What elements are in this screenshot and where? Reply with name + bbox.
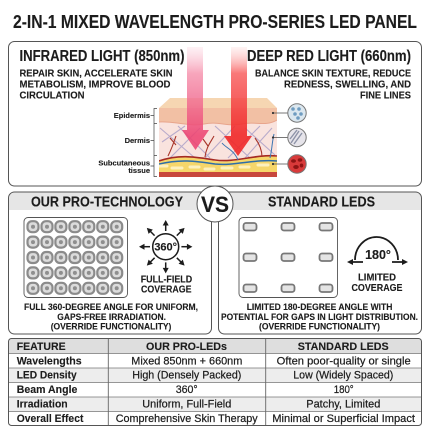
label: full-field coverage xyxy=(141,274,192,296)
text: infrared benefits: CIRCULATION xyxy=(20,89,84,101)
label: limited coverage: COVERAGE xyxy=(352,283,403,294)
LED grid: widely spaced xyxy=(239,218,338,298)
table row: wavelengths xyxy=(17,355,411,367)
table row: overall effect: Overall Effect xyxy=(17,413,84,425)
text: deep red benefits: REDNESS, SWELLING, AND xyxy=(284,78,411,90)
text: infrared benefits: METABOLISM, IMPROVE BLOOD xyxy=(20,78,171,90)
VS badge: VS xyxy=(201,192,229,217)
text: deep red benefits xyxy=(255,68,411,101)
text: standard LEDs description: LIMITED 180-DEGREE ANGLE WITH xyxy=(247,302,392,312)
table row: beam angle xyxy=(17,384,354,396)
heading: standard LEDs: STANDARD LEDS xyxy=(268,194,375,210)
label: limited coverage: LIMITED xyxy=(358,273,396,284)
table row: beam angle: 360° xyxy=(176,384,198,396)
text: standard LEDs description: POTENTIAL FOR GAPS IN LIGHT DISTRIBUTION. xyxy=(221,312,418,322)
table row: wavelengths: Often poor-quality or single xyxy=(277,355,411,367)
icon: collagen fibers xyxy=(272,128,306,147)
text: pro-technology description xyxy=(24,302,198,332)
heading: infrared light: INFRARED LIGHT (850nm) xyxy=(20,48,184,65)
skin cross-section diagram xyxy=(159,98,277,177)
table row: wavelengths: Mixed 850nm + 660nm xyxy=(131,355,242,367)
skin layer labels: Epidermis xyxy=(114,111,150,120)
table row: wavelengths: Wavelengths xyxy=(17,355,82,367)
icon: skin cells xyxy=(272,104,306,122)
table header xyxy=(17,341,389,353)
label: full-field coverage: COVERAGE xyxy=(141,285,192,296)
text: pro-technology description: FULL 360-DEGREE ANGLE FOR UNIFORM, xyxy=(24,302,198,312)
icon: 360 degree beam xyxy=(139,220,192,273)
table header: FEATURE xyxy=(17,341,66,353)
table row: overall effect xyxy=(17,413,415,425)
text: pro-technology description: (OVERRIDE FUNCTIONALITY) xyxy=(51,322,171,332)
table row: irradiation: Uniform, Full-Field xyxy=(142,399,231,411)
heading: our pro-technology: OUR PRO-TECHNOLOGY xyxy=(31,194,183,210)
panel: light wavelengths xyxy=(8,42,422,186)
VS badge xyxy=(197,186,233,222)
arrow: deep red beam xyxy=(224,47,252,156)
label: full-field coverage: FULL-FIELD xyxy=(141,274,192,285)
comparison table xyxy=(8,338,422,426)
table row: overall effect: Minimal or Superficial Impact xyxy=(272,413,415,425)
table row: beam angle: 180° xyxy=(334,384,354,396)
arrow: infrared beam xyxy=(182,47,209,150)
text: pro-technology description: GAPS-FREE IRRADIATION. xyxy=(57,312,166,322)
table row: LED density: Low (Widely Spaced) xyxy=(293,370,393,382)
LED grid: densely packed xyxy=(24,218,128,298)
table row: irradiation: Patchy, Limited xyxy=(306,399,380,411)
panel: our pro-technology xyxy=(8,192,212,334)
skin layer labels xyxy=(98,108,157,176)
text: standard LEDs description xyxy=(221,302,418,332)
panel: standard LEDs xyxy=(218,192,422,334)
table row: beam angle: Beam Angle xyxy=(17,384,77,396)
skin layer labels: tissue xyxy=(128,166,150,175)
text: deep red benefits: FINE LINES xyxy=(360,89,411,101)
table row: irradiation: Irradiation xyxy=(17,399,68,411)
icon: 180 degree beam: 180° xyxy=(365,248,391,262)
skin layer labels: Dermis xyxy=(125,136,150,145)
text: infrared benefits: REPAIR SKIN, ACCELERATE SKIN xyxy=(20,68,172,80)
skin layer labels: Subcutaneous xyxy=(98,158,150,168)
table row: LED density: High (Densely Packed) xyxy=(132,370,241,382)
table header: STANDARD LEDS xyxy=(298,341,389,353)
table row: LED density xyxy=(17,370,393,382)
text: standard LEDs description: (OVERRIDE FUNCTIONALITY) xyxy=(259,322,380,332)
text: infrared benefits xyxy=(20,68,172,101)
label: limited coverage xyxy=(352,273,403,294)
table header: OUR PRO-LEDs xyxy=(146,341,227,353)
table row: overall effect: Comprehensive Skin Therapy xyxy=(116,413,258,425)
table row: LED density: LED Density xyxy=(17,370,78,382)
icon: 360 degree beam: 360° xyxy=(154,242,177,254)
table row: irradiation xyxy=(17,399,380,411)
icon: red blood cells xyxy=(272,155,306,173)
icon: 180 degree beam xyxy=(347,237,408,265)
